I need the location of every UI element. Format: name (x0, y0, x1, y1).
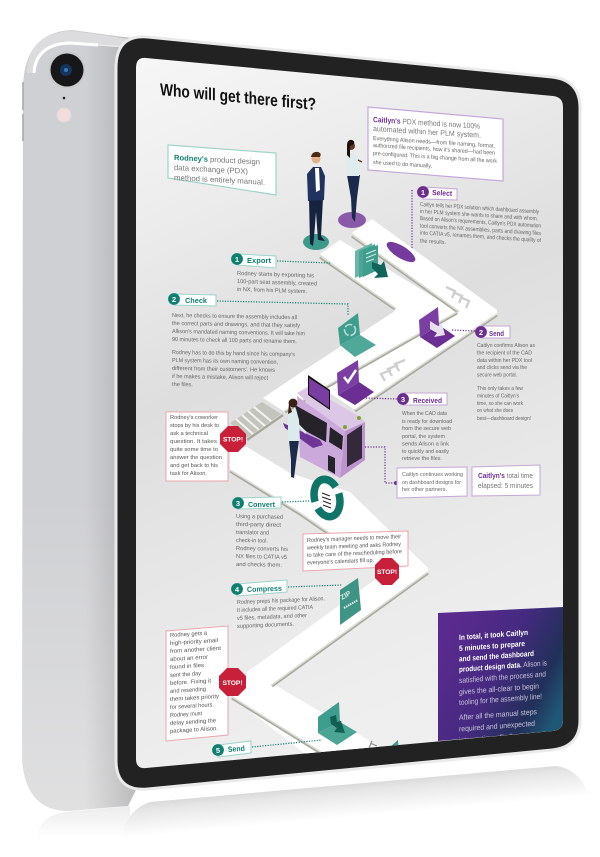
callout: Caitlyn's total time: Caitlyn's total time (478, 471, 533, 480)
icon: teal send (318, 702, 399, 752)
step: Received: retrieve the files. (402, 456, 442, 462)
step: Convert: third-party direct (236, 522, 281, 529)
stop note: coworker: quite some time to (170, 447, 218, 453)
callout: Rodney's method: data exchange (PDX) (174, 163, 248, 176)
stop sign 2: STOP! (377, 569, 397, 576)
tablet screen (130, 50, 570, 785)
stop sign 1 (220, 426, 246, 452)
step: Compress: It includes all the required CATIA (237, 605, 313, 614)
step: Send (Caitlyn): secure web portal. (477, 372, 517, 378)
step: Select: Based on Alison's requirements, Caitlyn's PDX automation (420, 216, 541, 230)
step: Received: Received (413, 396, 442, 405)
panel: summary: product design data. Alison is (459, 658, 547, 674)
icon: purple laptop (337, 360, 374, 405)
step: Select: the results. (420, 239, 446, 246)
step: Send (Caitlyn): Send (489, 329, 504, 338)
panel: summary (438, 607, 563, 741)
step: Check: the correct parts and drawings, and that they satisfy (172, 321, 300, 329)
step: Export (231, 253, 330, 296)
stop note: coworker: Rodney's coworker (170, 415, 218, 421)
stop note: coworker: task for Alison. (170, 471, 207, 477)
callout: Caitlyn's method: Caitlyn's PDX method is now 100% (373, 115, 480, 131)
step: Compress: Compress (247, 584, 282, 594)
step: Convert: translator and (236, 530, 269, 537)
step: Received: 3 (401, 395, 405, 404)
step: Check: Allison's mandated naming conventions. It will take him (172, 329, 305, 337)
step: Convert: and checks them. (236, 562, 282, 569)
stop note: urgent email: Rodney must (170, 711, 202, 719)
step: Export: Export (247, 256, 271, 265)
step: Received: to quickly and easily (402, 449, 449, 455)
tablet front bezel (116, 37, 580, 789)
step: Send (Rodney) (212, 740, 322, 757)
panel: summary: In total, it took Caitlyn (459, 628, 528, 642)
step: Compress: v5 files, metadata, and other (237, 613, 307, 622)
stop note: urgent email: before. Fixing it (170, 678, 211, 687)
stop sign 2 (375, 558, 399, 585)
step: Export: Rodney starts by exporting his (237, 271, 314, 279)
step: Convert (232, 497, 310, 569)
step: Send (Rodney): Send (228, 744, 245, 754)
step: Received (366, 393, 452, 462)
callout: Rodney's method (168, 145, 276, 195)
icon: documents (355, 243, 388, 278)
callout: Caitlyn's method: pre-configured. This is a big change from all the work (373, 151, 497, 165)
stop note: urgent email (166, 626, 228, 741)
step: Convert: check-in tool. (236, 538, 268, 545)
callout: Caitlyn's method: authorized file recipients, how it's shared—had been (373, 143, 495, 157)
stop note: urgent email: from another client (170, 646, 221, 655)
icon: zip file: ZIP (340, 590, 353, 602)
step: Check: the files. (172, 382, 193, 388)
step: Received: is ready for download (402, 419, 452, 425)
stop note: manager: everyone's calendars fill up. (307, 558, 374, 566)
step: Check: 2 (172, 295, 176, 304)
step: Check: Next, he checks to ensure the assembly includes all (172, 313, 297, 321)
note: Caitlyn continues: Caitlyn continues working (402, 472, 463, 478)
step: Select: in her PLM system she wants to share and with whom. (420, 209, 538, 222)
step: Convert: NX files to CATIA v5 (236, 554, 287, 561)
step: Compress (231, 580, 342, 630)
figure: Rodney (303, 152, 329, 250)
step: Received: When the CAD data (402, 411, 448, 417)
stop note: coworker: stops by his desk to (170, 423, 219, 429)
conveyor (230, 402, 283, 440)
callout: Caitlyn's method: she used to do manually. (373, 160, 432, 170)
panel: summary: required and unexpected (459, 719, 535, 733)
step: Compress: supporting documents. (237, 622, 294, 630)
step: Send (Caitlyn): 2 (479, 328, 483, 337)
step: Convert: 3 (236, 499, 240, 508)
step: Received: from the secure web (402, 426, 451, 432)
panel: summary: and send the dashboard (459, 649, 534, 663)
icon: teal laptop (338, 313, 376, 357)
callout: Rodney's method: Rodney's product design (174, 153, 260, 167)
stop note: manager: weekly team meeting and asks Rodney (306, 542, 401, 552)
step: Select: into CATIA v5, renames them, and checks the quality of (420, 231, 541, 244)
step: Export: 100-part seat assembly, created (237, 279, 317, 288)
callout: Caitlyn's method: automated within her PLM system. (373, 124, 481, 140)
step: Select: Caitlyn tells her PDX solution which dashboard assembly (420, 202, 539, 215)
stop note: urgent email: package to Alison. (170, 726, 218, 735)
note: Caitlyn continues: on dashboard designs for (402, 480, 461, 486)
step: Select: tool converts the NX assemblies, parts and drawing files (420, 224, 541, 237)
step: Send (Caitlyn): minutes of Caitlyn's (477, 394, 519, 400)
stop sign 3: STOP! (222, 680, 243, 687)
stop note: manager: Rodney's manager needs to move their (307, 534, 401, 544)
step: Check: Rodney has to do this by hand since his company's (172, 350, 295, 358)
step: Send (Caitlyn) (452, 326, 535, 422)
panel: summary: gives the all-clear to begin (459, 681, 539, 696)
stop note: urgent email: them takes priority (170, 694, 219, 703)
note: Caitlyn continues (397, 467, 467, 498)
step: Send (Caitlyn): on what she does (477, 408, 513, 414)
callout: Caitlyn's total time (472, 465, 540, 496)
step: Send (Caitlyn): data within her PDX tool (477, 358, 532, 364)
step: Compress: Rodney preps his package for Alison. (237, 596, 325, 606)
step: Send (Caitlyn): time, so she can work (477, 401, 523, 407)
step: Send (Caitlyn): Caitlyn confirms Alison as (477, 343, 535, 349)
stop note: coworker: ask a technical (170, 431, 208, 437)
step: Check: if he makes a mistake, Alison will reject (172, 374, 268, 382)
step: Compress: 4 (235, 585, 240, 594)
stop note: manager: to take care of the rescheduling before (307, 549, 402, 559)
panel: summary: After all the manual steps (459, 707, 537, 722)
callout: Caitlyn's method: Everything Alison needs—from file naming, format, (373, 136, 495, 150)
tablet back shell (22, 30, 136, 811)
isometric path: Caitlyn (285, 219, 497, 412)
stop note: manager (303, 531, 408, 571)
stop sign 3 (219, 668, 246, 696)
step: Convert: Using a purchased (236, 514, 283, 521)
stop note: coworker (166, 412, 228, 481)
step: Convert: Convert (248, 500, 275, 509)
panel: summary: satisfied with the process and (459, 669, 546, 685)
machine (283, 375, 365, 478)
icon: zip file (340, 578, 361, 625)
step: Select (412, 186, 541, 252)
step: Check: 90 minutes to check all 100 parts and rename them. (172, 337, 297, 345)
panel: summary: interruptions, Rodney gets (459, 730, 537, 745)
icon: chevrons (381, 287, 469, 381)
step: Check: different from their customers'. He knows (172, 366, 275, 374)
stop note: urgent email: found in files (170, 663, 204, 671)
icon: mouse (386, 242, 416, 262)
step: Select: Select (432, 188, 453, 198)
step: Check: PLM system has its own naming convention, (172, 358, 278, 366)
step: Convert: Rodney converts his (236, 546, 288, 553)
stop note: coworker: answer the question (170, 455, 222, 461)
isometric path: Rodney (230, 240, 458, 785)
stop note: coworker: and get back to his (170, 463, 218, 469)
note: Caitlyn continues: her other partners. (402, 487, 447, 493)
callout: Rodney's method: method is entirely manual. (174, 173, 265, 187)
callout: Caitlyn's total time: elapsed: 5 minutes (478, 481, 533, 490)
icon: convert cycle (310, 477, 344, 519)
stop note: urgent email: delay sending the (170, 718, 216, 727)
step: Received: sends Alison a link (402, 442, 449, 448)
icon: rear camera (48, 52, 86, 122)
connector: machine to note (365, 447, 398, 485)
stop note: coworker: question. It takes (170, 439, 217, 445)
icon: purple send (419, 307, 455, 348)
step: Check: Check (185, 296, 208, 305)
step: Send (Caitlyn): the recipient of the CAD (477, 350, 532, 356)
stop sign 1: STOP! (223, 436, 243, 444)
figure: Caitlyn at machine (288, 399, 306, 478)
stop note: urgent email: sent the day (170, 671, 201, 679)
stop note: urgent email: high-priority email (170, 638, 218, 647)
step: Send (Caitlyn): This only takes a few (477, 386, 524, 392)
step: Send (Caitlyn): best—dashboard design! (477, 416, 531, 422)
figure: Caitlyn (338, 140, 366, 228)
step: Check (168, 293, 348, 390)
step: Select: 1 (421, 188, 426, 197)
panel: summary: tooling for the assembly line! (459, 692, 542, 707)
panel: summary: 5 minutes to prepare (459, 639, 525, 653)
step: Export: in NX, from his PLM system. (237, 287, 307, 295)
step: Export: 1 (235, 255, 240, 264)
stop note: urgent email: and resending (170, 687, 206, 695)
tablet reflection (36, 766, 592, 845)
title: Who will get there first? (160, 80, 316, 114)
callout: Caitlyn's method (368, 107, 503, 181)
step: Send (Caitlyn): and clicks send via the (477, 365, 527, 371)
step: Received: portal, the system (402, 434, 445, 440)
stop note: urgent email: for several hours. (170, 702, 214, 711)
stop note: urgent email: Rodney gets a (170, 631, 208, 639)
stop note: urgent email: about an error (170, 655, 208, 663)
step: Send (Rodney): 5 (216, 746, 221, 755)
